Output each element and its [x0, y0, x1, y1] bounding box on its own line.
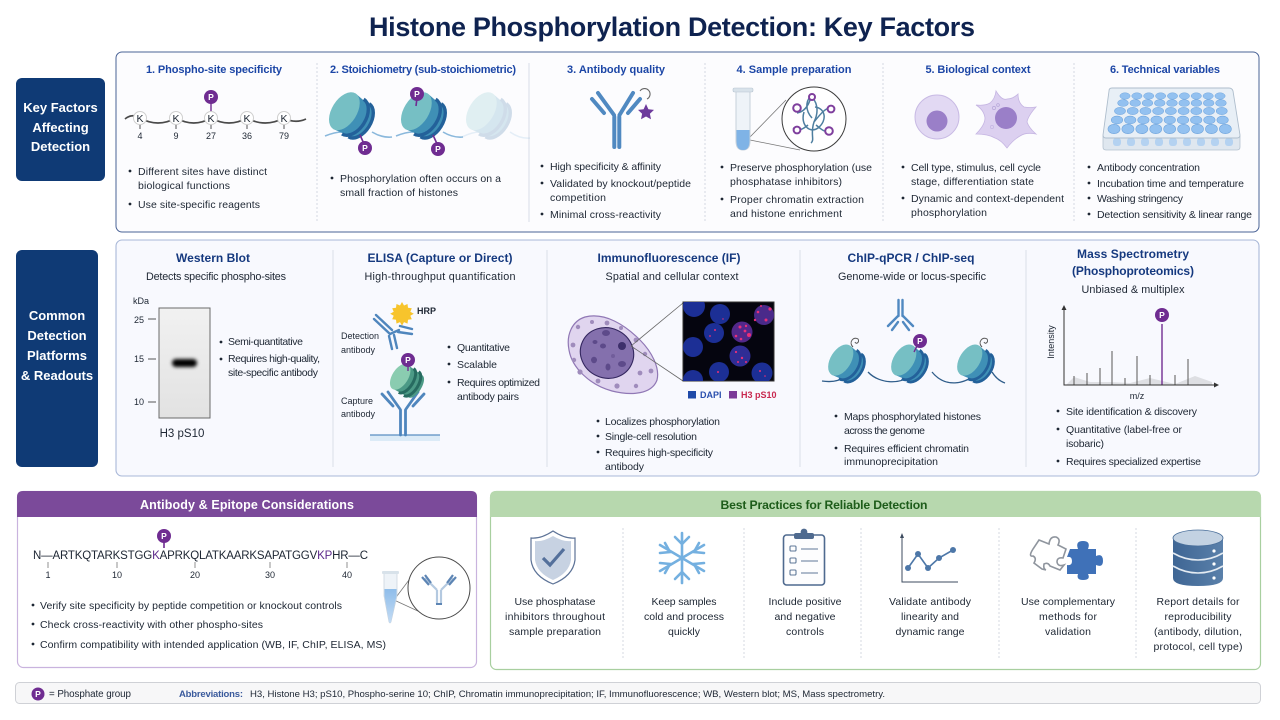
diagram: antibody on chromatin: P	[917, 336, 923, 346]
factor 3: antibody quality	[541, 64, 691, 221]
chart: mass spectrum: P	[1159, 310, 1165, 320]
text: Use phosphatase	[514, 596, 596, 608]
bullets: Quantitative	[457, 342, 510, 354]
panel: best practices	[490, 491, 1261, 670]
icon: histone tail with lysines: 27	[206, 131, 216, 141]
bullets: Preserve phosphorylation (use	[730, 162, 872, 174]
chart: blot image: kDa	[133, 296, 149, 306]
text: methods for	[1039, 611, 1098, 623]
heading: Mass Spectrometry	[1077, 247, 1189, 261]
panel: detection platforms	[116, 240, 1259, 476]
bullets: Minimal cross-reactivity	[550, 209, 662, 221]
bullets: isobaric)	[1066, 438, 1104, 450]
text	[505, 596, 605, 638]
text	[1021, 596, 1116, 638]
diagram: histone sequence: 1	[45, 570, 51, 580]
text: linearity and	[901, 611, 959, 623]
icon: round and stellate cells	[915, 91, 1036, 148]
icon: snowflake	[660, 533, 704, 583]
diagram: sandwich elisa: antibody	[341, 409, 376, 419]
icon: nucleosomes with phosphates: P	[414, 89, 420, 99]
bullets: Use site-specific reagents	[138, 199, 260, 211]
icon: histone tail with lysines: 9	[173, 131, 179, 141]
side label: detection platforms: Detection	[27, 328, 87, 343]
factor 6: technical variables	[1088, 64, 1252, 221]
legend: H3 pS10	[741, 390, 777, 400]
side label: key factors: Affecting	[32, 120, 89, 135]
panel: key factors	[116, 52, 1259, 232]
icon: histone tail with lysines: K	[172, 113, 180, 125]
chart: mass spectrum: m/z	[1130, 391, 1145, 401]
text: Report details for	[1156, 596, 1240, 608]
header bar	[17, 491, 477, 517]
icon: histone tail with lysines: 36	[242, 131, 252, 141]
icon: database	[1173, 530, 1223, 586]
chart: blot image: 15	[134, 354, 144, 364]
phosphate key: = Phosphate group	[49, 689, 132, 700]
subheading: Unbiased & multiplex	[1082, 284, 1185, 296]
diagram: sandwich elisa: Detection	[341, 331, 379, 341]
icon: puzzle pieces	[1030, 537, 1103, 580]
bullets: Requires optimized	[457, 377, 540, 389]
abbreviations: Abbreviations:	[179, 689, 243, 700]
diagram: sandwich elisa: Capture	[341, 396, 373, 406]
bullets	[597, 416, 720, 473]
bullets	[129, 166, 267, 211]
bullets: Semi-quantitative	[228, 336, 303, 348]
icon: histone tail with lysines: 4	[137, 131, 143, 141]
header bar: Antibody & Epitope Considerations	[140, 498, 354, 512]
text: Use complementary	[1021, 596, 1116, 608]
text: dynamic range	[896, 626, 965, 638]
text: (antibody, dilution,	[1154, 626, 1242, 638]
diagram: histone sequence: 20	[190, 570, 200, 580]
heading: 5. Biological context	[926, 64, 1031, 76]
bullets: stage, differentiation state	[911, 176, 1034, 188]
practice 6: report details	[1154, 530, 1242, 653]
heading: ChIP-qPCR / ChIP-seq	[848, 251, 974, 265]
bullets	[220, 336, 320, 379]
text: Include positive	[768, 596, 842, 608]
heading: 2. Stoichiometry (sub-stoichiometric)	[330, 64, 516, 76]
practice 1: phosphatase inhibitors	[505, 531, 605, 638]
footer legend	[16, 682, 1260, 704]
phosphate key: P	[35, 689, 41, 699]
bullets: Requires high-quality,	[228, 353, 320, 365]
bullets: Dynamic and context-dependent	[911, 193, 1064, 205]
icon: line chart	[900, 533, 958, 582]
bullets	[331, 173, 501, 199]
side label: detection platforms: Common	[29, 308, 85, 323]
icon: nucleosomes with phosphates: P	[362, 143, 368, 153]
bullets: Quantitative (label-free or	[1066, 424, 1182, 436]
text: reproducibility	[1164, 611, 1232, 623]
bullets: antibody	[605, 461, 645, 473]
icon: clipboard checklist	[784, 529, 824, 585]
platform: immunofluorescence	[568, 251, 777, 473]
chart: mass spectrum	[1046, 305, 1219, 401]
side label: detection platforms	[16, 250, 98, 467]
header bar: Best Practices for Reliable Detection	[720, 498, 928, 512]
bullets: Verify site specificity by peptide competition or knockout controls	[40, 600, 342, 612]
diagram: histone sequence: N—ARTKQTARKSTGGKAPRKQLATKAARKSAPATGGVKPHR—C	[33, 550, 368, 562]
bullets	[1057, 406, 1201, 468]
bullets: Scalable	[457, 359, 497, 371]
text	[1154, 596, 1242, 653]
text: Validate antibody	[889, 596, 972, 608]
bullets: Requires specialized expertise	[1066, 456, 1201, 468]
text: quickly	[668, 626, 701, 638]
side label: key factors: Key Factors	[23, 100, 98, 115]
bullets: Cell type, stimulus, cell cycle	[911, 162, 1041, 174]
bullets: immunoprecipitation	[844, 456, 938, 468]
practice 3: controls	[768, 529, 842, 638]
bullets: Antibody concentration	[1097, 162, 1200, 174]
heading: 6. Technical variables	[1110, 64, 1220, 76]
header bar	[490, 491, 1261, 517]
text: controls	[786, 626, 824, 638]
icon: nucleosomes with phosphates	[323, 87, 530, 156]
phosphate key	[32, 688, 132, 700]
panel: antibody and epitope considerations	[17, 491, 477, 668]
text	[644, 596, 724, 638]
bullets: High specificity & affinity	[550, 161, 662, 173]
icon: histone tail with lysines: 79	[279, 131, 289, 141]
diagram: histone sequence	[33, 529, 368, 580]
icon: nucleosomes with phosphates: P	[435, 144, 441, 154]
diagram: sandwich elisa: HRP	[417, 306, 436, 316]
platform: western blot	[133, 251, 320, 440]
platform: mass spectrometry: (Phosphoproteomics)	[1072, 264, 1194, 278]
bullets: Proper chromatin extraction	[730, 194, 864, 206]
icon: histone tail with lysines: K	[207, 113, 215, 125]
bullets: phosphorylation	[911, 207, 987, 219]
bullets: Requires efficient chromatin	[844, 443, 969, 455]
bullets: site-specific antibody	[228, 367, 319, 379]
bullets: biological functions	[138, 180, 230, 192]
diagram: histone sequence: 10	[112, 570, 122, 580]
bullets	[721, 162, 872, 220]
diagram: antibody on chromatin	[822, 300, 1005, 388]
icon: tube with antibody magnifier	[382, 557, 470, 623]
icon: histone tail with lysines	[125, 90, 306, 141]
subheading: High-throughput quantification	[364, 271, 516, 283]
diagram: sandwich elisa	[341, 302, 440, 441]
bullets: and histone enrichment	[730, 208, 842, 220]
factor 1: phospho-site specificity	[125, 64, 306, 211]
subheading: Genome-wide or locus-specific	[838, 271, 987, 283]
diagram: histone sequence: 40	[342, 570, 352, 580]
practice 4: linearity	[889, 533, 972, 638]
bullets: antibody pairs	[457, 391, 519, 403]
chart: fluorescence micrograph	[682, 302, 774, 382]
bullets	[32, 600, 386, 651]
bullets: Validated by knockout/peptide	[550, 178, 691, 190]
icon: tube with chromatin magnifier	[733, 87, 846, 151]
chart: blot image	[133, 296, 210, 440]
factor 5: biological context	[902, 64, 1064, 219]
text: protocol, cell type)	[1154, 641, 1242, 653]
abbreviations: H3, Histone H3; pS10, Phospho-serine 10; ChIP, Chromatin immunoprecipitation; IF, Immunofluorescence; WB, Western blot; MS, Mass spectrometry.	[250, 689, 885, 700]
bullets: Check cross-reactivity with other phospho-sites	[40, 619, 263, 631]
heading: 1. Phospho-site specificity	[146, 64, 283, 76]
side label: detection platforms: Platforms	[27, 348, 87, 363]
text	[889, 596, 972, 638]
bullets: Washing stringency	[1097, 193, 1184, 205]
icon: well plate	[1103, 88, 1240, 150]
text: Keep samples	[652, 596, 716, 608]
icon: histone tail with lysines: K	[280, 113, 288, 125]
icon: histone tail with lysines: K	[136, 113, 144, 125]
text: sample preparation	[509, 626, 601, 638]
chart: mass spectrum: Intensity	[1046, 325, 1056, 359]
heading: Western Blot	[176, 251, 250, 265]
bullets: Maps phosphorylated histones	[844, 411, 981, 423]
bullets: Incubation time and temperature	[1097, 178, 1244, 190]
side label: detection platforms: & Readouts	[21, 368, 93, 383]
diagram: histone sequence: P	[161, 531, 167, 541]
platform: chip	[822, 251, 1005, 468]
bullets	[835, 411, 981, 468]
heading: 3. Antibody quality	[567, 64, 666, 76]
text: inhibitors throughout	[505, 611, 605, 623]
text: and negative	[774, 611, 836, 623]
bullets	[902, 162, 1064, 219]
bullets: Detection sensitivity & linear range	[1097, 209, 1252, 221]
platform: elisa	[341, 251, 540, 441]
diagram: histone sequence: 30	[265, 570, 275, 580]
side label: key factors: Detection	[31, 139, 90, 154]
subheading: Detects specific phospho-sites	[146, 271, 287, 283]
bullets: Different sites have distinct	[138, 166, 267, 178]
platform: mass spectrometry	[1046, 247, 1219, 468]
text: cold and process	[644, 611, 724, 623]
bullets: small fraction of histones	[340, 187, 458, 199]
icon: histone tail with lysines: K	[243, 113, 251, 125]
bullets: competition	[550, 192, 606, 204]
heading: Immunofluorescence (IF)	[598, 251, 740, 265]
practice 5: complementary methods	[1021, 537, 1116, 638]
side label: key factors	[16, 78, 105, 181]
icon: histone tail with lysines: P	[208, 92, 214, 102]
legend	[688, 390, 777, 400]
diagram: sandwich elisa: P	[405, 355, 411, 365]
bullets: Single-cell resolution	[605, 431, 697, 443]
icon: antibody with star label	[592, 89, 654, 147]
bullets: Localizes phosphorylation	[605, 416, 720, 428]
chart: blot image: H3 pS10	[160, 428, 204, 440]
diagram: sandwich elisa: antibody	[341, 345, 376, 355]
bullets: Phosphorylation often occurs on a	[340, 173, 501, 185]
subheading: Spatial and cellular context	[606, 271, 738, 283]
bullets: Site identification & discovery	[1066, 406, 1198, 418]
bullets: Confirm compatibility with intended application (WB, IF, ChIP, ELISA, MS)	[40, 639, 386, 651]
text	[768, 596, 842, 638]
heading: 4. Sample preparation	[736, 64, 852, 76]
bullets: across the genome	[844, 425, 925, 437]
legend: DAPI	[700, 390, 722, 400]
bullets	[541, 161, 691, 221]
chart: blot image: 10	[134, 397, 144, 407]
practice 2: keep samples cold	[644, 533, 724, 638]
icon: shield	[531, 531, 575, 584]
bullets	[448, 342, 540, 403]
text: validation	[1045, 626, 1091, 638]
diagram: cell illustration	[568, 303, 683, 393]
bullets: phosphatase inhibitors)	[730, 176, 842, 188]
heading: ELISA (Capture or Direct)	[368, 251, 512, 265]
chart: blot image: 25	[134, 315, 144, 325]
factor 4: sample preparation	[721, 64, 872, 220]
factor 2: stoichiometry	[323, 64, 530, 199]
bullets: Requires high-specificity	[605, 447, 714, 459]
title: Histone Phosphorylation Detection: Key Factors	[369, 12, 975, 42]
bullets	[1088, 162, 1252, 221]
